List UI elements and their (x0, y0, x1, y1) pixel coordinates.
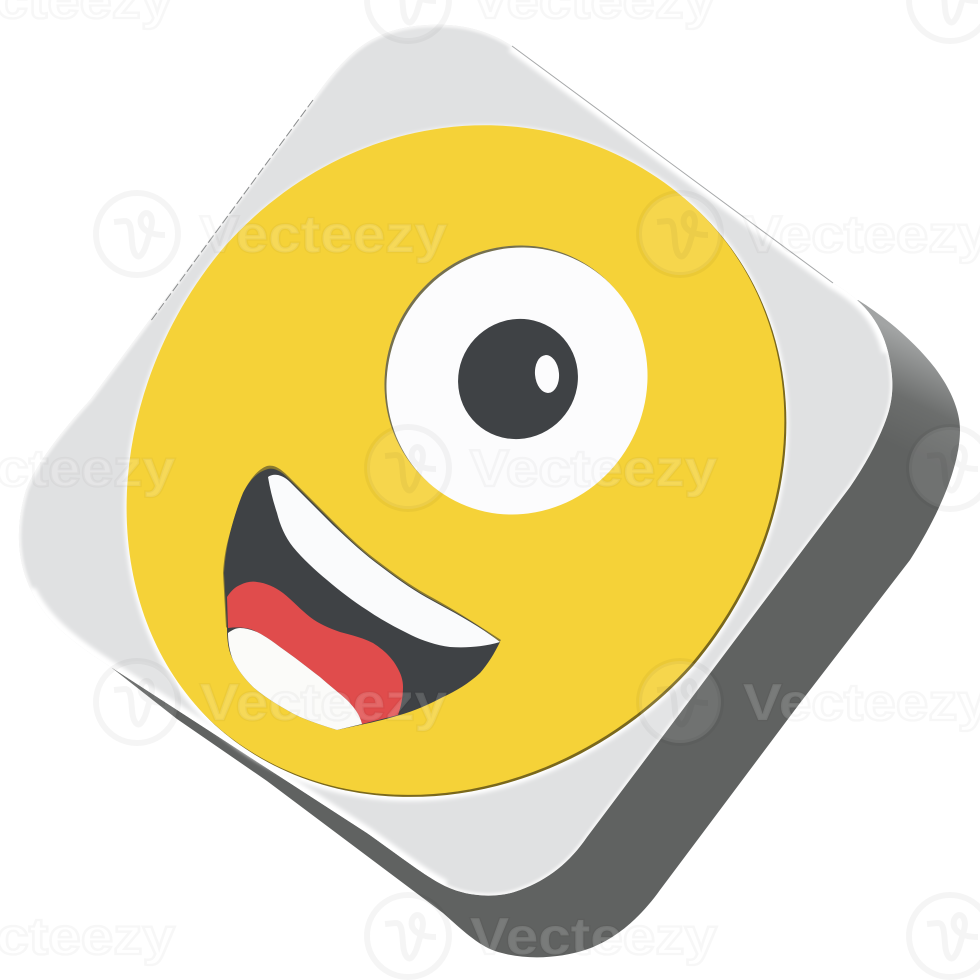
mouth (223, 466, 501, 730)
upper teeth (268, 475, 500, 647)
emoji face (127, 125, 786, 798)
tile side shadow (112, 300, 960, 957)
watermark text rows: Vecteezy (743, 674, 980, 732)
watermark text rows: Vecteezy (743, 206, 980, 264)
watermark text rows: Vecteezy (470, 440, 717, 498)
tongue (227, 582, 403, 724)
watermark text rows: Vecteezy (470, 908, 717, 966)
watermark text rows: Vecteezy (200, 206, 447, 264)
watermark text rows: Vecteezy (200, 674, 447, 732)
eye (336, 198, 696, 562)
pupil (433, 294, 603, 464)
tile top face (19, 25, 892, 896)
eye highlight (533, 354, 561, 394)
lower teeth (228, 628, 362, 730)
